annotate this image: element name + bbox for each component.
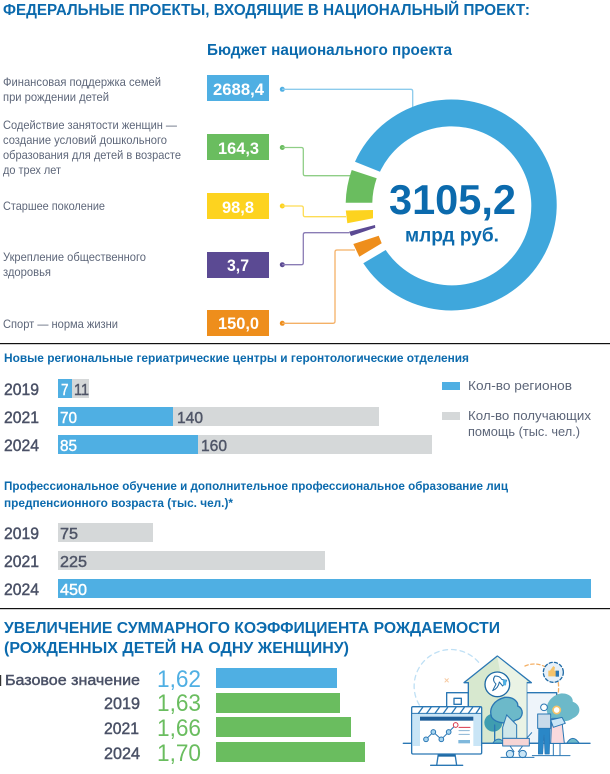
donut chart (346, 99, 557, 310)
heading: fertility rate (4, 620, 500, 657)
value box: 3,7: 3,7 (227, 257, 249, 275)
icon: thumbs up (543, 662, 563, 682)
row 2019: 2019 (104, 695, 140, 713)
icon: monitor with chart (412, 707, 482, 765)
project label: women's employment: Содействие занятости женщин — (3, 118, 177, 132)
row 2021: 225 (60, 554, 87, 571)
row 2021: 2021 (104, 720, 139, 738)
row 2024 (4, 435, 432, 455)
row 2021: 70 (60, 410, 77, 427)
row 2019: 1,63 (157, 690, 201, 717)
bar chart: fertility rate (0, 666, 365, 767)
row 2024: 2024 (104, 745, 140, 763)
value box: 98,8: 98,8 (222, 199, 254, 217)
row base value (5, 666, 337, 693)
project label: family support (3, 75, 161, 104)
heading: fertility rate: (РОЖДЕННЫХ ДЕТЕЙ НА ОДНУ ЖЕНЩИНУ) (4, 638, 349, 657)
project label: sport: Спорт — норма жизни (3, 317, 118, 331)
bar chart: geriatric centers (4, 379, 432, 455)
heading: professional training: предпенсионного возраста (тыс. чел.)* (4, 496, 233, 510)
icon: stork (485, 672, 510, 697)
connector: yellow (280, 204, 346, 217)
row base value: 1,62 (157, 666, 201, 693)
segment: family support (355, 99, 557, 310)
value box: 150,0: 150,0 (218, 315, 259, 333)
heading: professional training (4, 479, 509, 510)
project label: older generation: Старшее поколение (3, 199, 105, 213)
donut total value: 3105,2 (389, 176, 516, 223)
row 2019: 7 (61, 382, 68, 399)
row 2019 (4, 379, 89, 399)
row 2024 (4, 579, 591, 599)
icon: stroller (501, 715, 534, 758)
row 2024: 1,70 (157, 740, 201, 767)
row 2021: 2021 (4, 553, 39, 571)
legend: помощь (тыс. чел.) (468, 424, 580, 439)
bar chart: professional training (4, 523, 591, 599)
value box: 164,3: 164,3 (218, 140, 259, 158)
project label: public health: Укрепление общественного (3, 250, 146, 264)
connector: orange (280, 250, 355, 326)
legend: Кол-во получающих (468, 408, 591, 423)
heading: geriatric centers: Новые региональные гериатрические центры и геронтологические отделения (4, 351, 469, 365)
row 2019: 11 (74, 382, 89, 399)
project label: family support: при рождении детей (3, 90, 109, 104)
row 2021: 1,66 (157, 715, 201, 742)
title: federal projects: ФЕДЕРАЛЬНЫЕ ПРОЕКТЫ, ВХОДЯЩИЕ В НАЦИОНАЛЬНЫЙ ПРОЕКТ: (3, 1, 530, 19)
row 2019: 75 (60, 526, 78, 543)
segment: sport (353, 236, 382, 257)
project label: women's employment: до трех лет (3, 163, 61, 177)
value box: 2688,4: 2688,4 (213, 81, 265, 99)
row 2021: 140 (177, 410, 203, 427)
segment: older generation (346, 210, 373, 223)
row 2024: 450 (60, 582, 87, 599)
value box: 150,0 (207, 310, 269, 336)
row 2024: 2024 (4, 581, 39, 599)
project label: public health: здоровья (3, 265, 51, 279)
project label: women's employment (3, 118, 181, 177)
row 2024: 160 (201, 438, 227, 455)
project label: family support: Финансовая поддержка семей (3, 75, 161, 89)
row 2019 (4, 523, 153, 543)
heading: professional training: Профессиональное обучение и дополнительное профессиональное образование лиц (4, 479, 509, 493)
connector: purple (280, 233, 349, 267)
value box: 164,3 (207, 134, 269, 160)
heading: fertility rate: УВЕЛИЧЕНИЕ СУММАРНОГО КОЭФФИЦИЕНТА РОЖДАЕМОСТИ (4, 620, 500, 637)
panel: project budget list and donut chart (3, 75, 557, 336)
project label: women's employment: создание условий дошкольного (3, 133, 167, 147)
row 2024: 85 (60, 438, 77, 455)
row 2021 (4, 551, 325, 571)
segment: women's employment (346, 170, 377, 203)
value box: 2688,4 (207, 75, 269, 101)
value box: 3,7 (207, 252, 269, 278)
row 2024 (104, 740, 365, 767)
project label: public health (3, 250, 146, 279)
donut total unit: млрд руб. (405, 226, 499, 246)
heading: national project budget: Бюджет национального проекта (207, 42, 452, 59)
row 2019 (104, 690, 340, 717)
row 2021: 2021 (4, 409, 39, 427)
legend: Кол-во регионов (468, 378, 572, 393)
row 2019: 2019 (4, 381, 39, 399)
row 2021 (104, 715, 351, 742)
row 2024: 2024 (4, 437, 39, 455)
connector: blue (280, 87, 413, 107)
segment: public health (349, 225, 375, 236)
legend (442, 378, 591, 439)
project label: women's employment: образования для детей в возрасте (3, 148, 181, 162)
row 2019: 2019 (4, 525, 39, 543)
row 2021 (4, 407, 379, 427)
value box: 98,8 (207, 193, 269, 219)
row base value: Базовое значение (5, 672, 140, 689)
illustration: family, house and monitor (403, 650, 590, 765)
connector: green (280, 145, 351, 176)
icon: parents with baby (532, 704, 570, 756)
